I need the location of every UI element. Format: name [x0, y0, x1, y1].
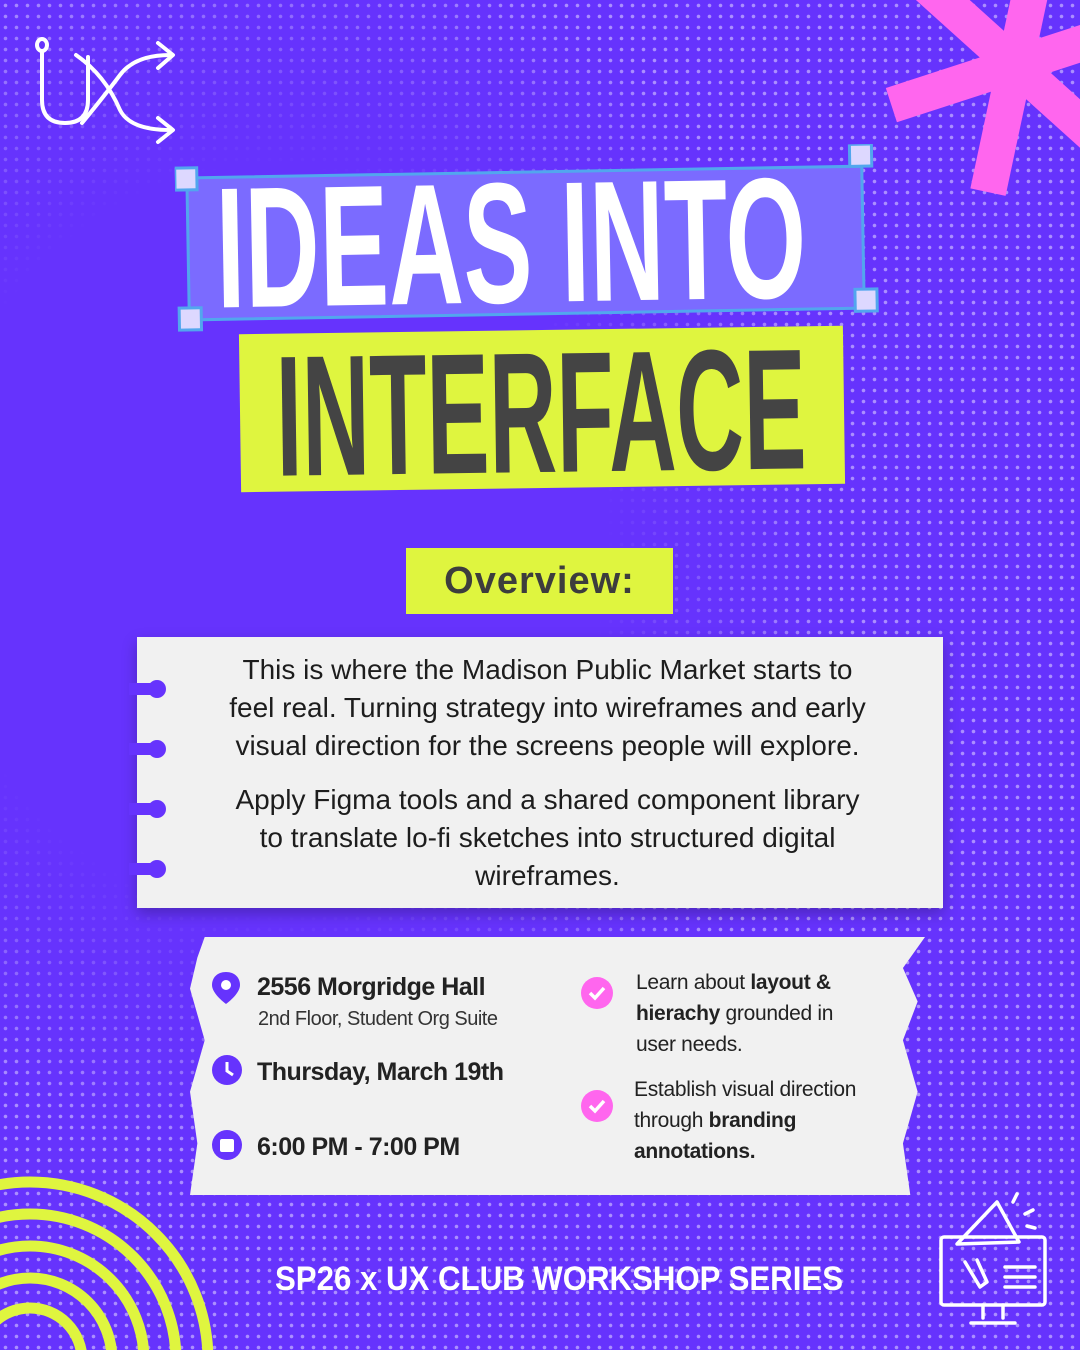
icon: clock — [212, 1055, 242, 1085]
icon: check 2 — [581, 1090, 613, 1122]
heading: Overview — [406, 548, 673, 614]
text: learning 2: through branding — [634, 1109, 796, 1132]
text: description: feel real. Turning strategy into wireframes and early — [229, 692, 866, 723]
text: location: 2556 Morgridge Hall — [257, 973, 485, 1001]
logo: UX — [35, 37, 176, 144]
icon: pink asterisk — [886, 0, 1080, 196]
heading: Overview: Overview: — [444, 560, 635, 602]
text: date: Thursday, March 19th — [257, 1058, 504, 1086]
text: learning 1 — [637, 974, 832, 1051]
text: learning 1: Learn about layout & — [636, 971, 831, 994]
icon: spiral notches — [129, 680, 166, 878]
panel: event details: 2nd Floor, Student Org Suite — [258, 1008, 498, 1030]
icon: calendar — [212, 1130, 242, 1160]
panel: overview text — [137, 637, 943, 908]
text: description: to translate lo-fi sketches into structured digital — [260, 822, 835, 853]
text: learning 2 — [634, 1080, 856, 1158]
text: learning 1: hierachy grounded in — [636, 1002, 833, 1025]
text: description: This is where the Madison Public Market starts to — [242, 654, 852, 685]
icon: location — [212, 972, 240, 1004]
text: description: visual direction for the screens people will explore. — [235, 730, 860, 761]
text: description: Apply Figma tools and a shared component library — [235, 784, 860, 815]
icon: check 1 — [581, 977, 613, 1009]
text: description: wireframes. — [475, 860, 620, 891]
decoration: yellow arcs — [0, 1176, 214, 1350]
text: description — [229, 654, 866, 891]
icon: megaphone monitor — [939, 1192, 1047, 1325]
text: learning 1: user needs. — [636, 1033, 742, 1056]
text: time: 6:00 PM - 7:00 PM — [257, 1133, 460, 1161]
text: learning 2: Establish visual direction — [634, 1078, 856, 1101]
text: learning 2: annotations. — [634, 1140, 755, 1163]
panel: event details — [190, 937, 925, 1195]
